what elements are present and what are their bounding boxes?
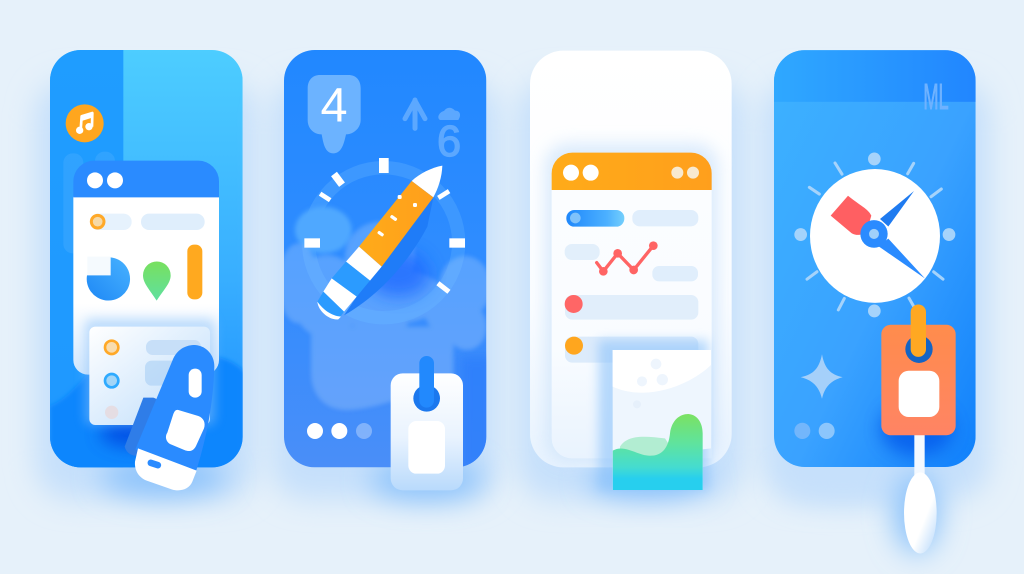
icon: ship / pencil — [317, 166, 442, 320]
app window card — [552, 153, 712, 458]
pie chart — [87, 257, 130, 301]
badge with number 4 — [308, 75, 361, 153]
badge with number 4: 4 — [320, 79, 348, 133]
phone 3 body — [530, 51, 732, 467]
icon: blue tube applicator — [125, 345, 214, 490]
phone 1: music dashboard — [35, 50, 258, 500]
phone 2 body — [278, 50, 493, 470]
pagination dots — [307, 423, 372, 439]
phone 2 shadow — [270, 80, 500, 500]
map pin — [143, 261, 171, 301]
orange bar — [187, 245, 202, 299]
orange tag — [881, 305, 956, 435]
clock — [810, 169, 940, 303]
clouds — [278, 222, 491, 410]
phone 4 shadow — [762, 81, 990, 554]
gauge ring — [309, 168, 459, 318]
gauge ticks — [304, 158, 465, 294]
phone 4 body — [774, 50, 976, 467]
clock face ticks — [794, 153, 955, 317]
phone 3 shadow — [517, 80, 745, 500]
mini chart card — [598, 340, 711, 490]
icon: small cloud — [438, 108, 460, 120]
line chart — [597, 241, 658, 276]
icon: sparkle — [801, 354, 843, 399]
luggage tag — [391, 356, 463, 490]
logo mark: ML — [923, 76, 949, 117]
icon: music note badge — [66, 104, 104, 142]
app window card — [73, 161, 219, 375]
cotton swab — [904, 434, 937, 554]
list row orange — [565, 337, 698, 363]
phone 4: clock — [762, 50, 990, 554]
lower overlay card — [85, 318, 215, 425]
phone 1 body — [50, 50, 250, 473]
phone 1 shadow — [35, 80, 258, 500]
pagination dots — [794, 423, 835, 439]
phone 2: ship gauge — [270, 50, 500, 500]
icon: up arrow — [405, 100, 425, 128]
list row red — [565, 295, 698, 320]
phone 3: white analytics — [517, 51, 745, 500]
number 6: 6 — [437, 118, 461, 166]
